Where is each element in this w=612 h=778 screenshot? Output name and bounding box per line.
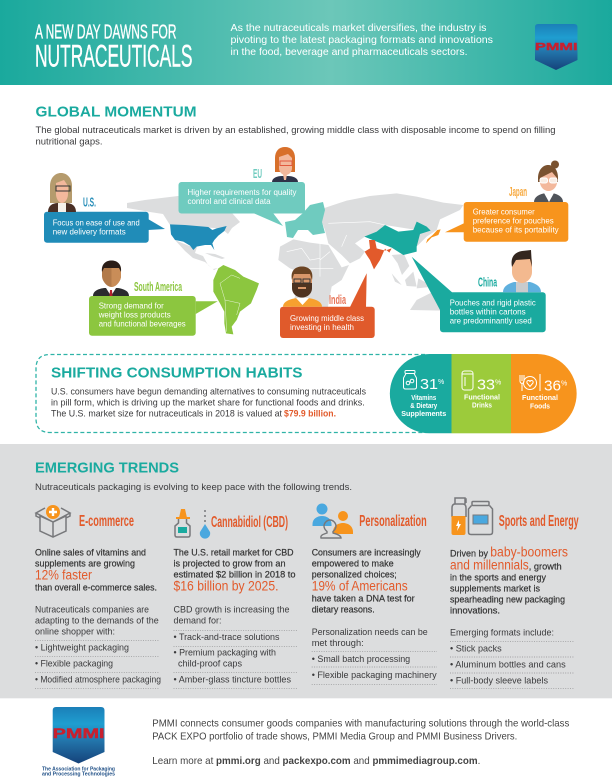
header intro text <box>230 22 493 58</box>
segment: vitamins 31%: & Dietary <box>410 401 438 410</box>
e-commerce details: adapting to the demands of the <box>35 616 159 627</box>
segment: foods 36%: Foods <box>530 401 550 410</box>
title <box>35 21 192 74</box>
callout: Japan: Greater consumer <box>473 207 535 217</box>
e-commerce list: • Lightweight packaging <box>35 643 129 654</box>
footer PMMI logo <box>53 707 104 764</box>
label: China: China <box>478 276 498 290</box>
global momentum intro text: nutritional gaps. <box>36 137 102 148</box>
footer text: PMMI connects consumer goods companies with manufacturing solutions through the world-class <box>152 717 569 729</box>
emerging trends intro: Nutraceuticals packaging is evolving to keep pace with the following trends. <box>35 482 352 493</box>
callout: South America: and functional beverages <box>99 319 186 329</box>
segment: vitamins 31% <box>390 354 452 433</box>
sports and energy list: • Full-body sleeve labels <box>450 676 548 687</box>
callout: China: bottles within cartons <box>450 307 526 317</box>
footer logo tagline: The Association for Packaging <box>42 767 115 773</box>
shifting consumption body text <box>51 386 366 419</box>
personalization lead text: dietary reasons. <box>312 605 375 616</box>
callout: China: are predominantly used <box>450 316 532 326</box>
icon: open box with plus <box>36 505 70 537</box>
column: personalization <box>312 504 437 684</box>
segment: drinks 33%: Drinks <box>472 400 492 409</box>
person: South America man <box>93 260 129 296</box>
callout: India: investing in health <box>290 322 354 332</box>
shifting consumption body text: U.S. consumers have begun demanding alternatives to consuming nutraceuticals <box>51 386 366 397</box>
cannabidiol lead text: is projected to grow from an <box>174 559 286 570</box>
segment: vitamins 31%: % <box>438 379 444 386</box>
callout: U.S. <box>44 212 165 243</box>
PMMI logo: PMMI <box>535 41 578 53</box>
segment: foods 36% <box>511 354 577 433</box>
heading: global momentum: GLOBAL MOMENTUM <box>36 104 196 121</box>
personalization lead text <box>312 548 421 616</box>
segment: drinks 33%: Functional <box>464 392 500 401</box>
cannabidiol details <box>174 605 290 627</box>
eurasia, africa and oceania land <box>278 193 463 311</box>
sports and energy list <box>450 641 574 688</box>
india highlighted <box>365 240 392 269</box>
callout: India <box>280 273 375 338</box>
personalization details: Personalization needs can be <box>312 627 428 638</box>
personalization lead text: personalized choices; <box>312 570 397 581</box>
shifting consumption body text: The U.S. market size for nutraceuticals in 2018 is valued at <box>51 408 282 419</box>
column: e-commerce <box>35 505 161 688</box>
column: sports and energy <box>450 498 579 688</box>
heading: e-commerce: E-commerce <box>79 513 134 530</box>
title: A NEW DAY DAWNS FOR <box>35 21 176 44</box>
icon: people <box>312 504 353 538</box>
icon: drink can <box>462 371 473 390</box>
dashed panel border <box>36 354 425 432</box>
e-commerce details: online shopper with: <box>35 627 115 638</box>
segment: drinks 33% <box>452 354 511 433</box>
person: Japan woman <box>534 160 563 202</box>
callout: South America <box>89 296 218 336</box>
callout: U.S.: Focus on ease of use and <box>53 218 140 228</box>
label: South America: South America <box>134 280 183 294</box>
heading: shifting consumption habits: SHIFTING CONSUMPTION HABITS <box>51 365 302 382</box>
cannabidiol lead text <box>174 548 296 594</box>
e-commerce list: • Flexible packaging <box>35 659 113 670</box>
heading: emerging trends: EMERGING TRENDS <box>35 460 179 477</box>
header intro text: in the food, beverage and pharmaceuticals sectors. <box>230 46 468 58</box>
header intro text: pivoting to the latest packaging formats and innovations <box>230 34 493 46</box>
pill chart: market shares <box>390 354 577 433</box>
united states highlighted <box>170 224 227 250</box>
e-commerce list: • Modified atmosphere packaging <box>35 675 161 686</box>
callout: South America: weight loss products <box>98 310 171 320</box>
e-commerce details: Nutraceuticals companies are <box>35 605 149 616</box>
sports and energy lead text: spearheading new packaging <box>450 595 565 606</box>
person: EU woman <box>272 147 298 182</box>
callout: Japan <box>445 202 568 242</box>
title: NUTRACEUTICALS <box>35 38 192 74</box>
footer logo tagline: and Processing Technologies <box>42 772 115 778</box>
e-commerce lead text: 12% faster <box>35 567 92 582</box>
callout: U.S.: new delivery formats <box>53 227 126 237</box>
label: India: India <box>329 293 347 307</box>
footer logo tagline <box>42 767 115 778</box>
global momentum intro text <box>36 125 556 148</box>
footer text: PACK EXPO portfolio of trade shows, PMMI Media Group and PMMI Business Drivers. <box>152 730 517 742</box>
sports and energy details: Emerging formats include: <box>450 628 554 639</box>
e-commerce lead text: supplements are growing <box>35 559 135 570</box>
sports and energy lead text: baby-boomers <box>490 545 568 560</box>
icon: plate with heart <box>520 374 540 391</box>
e-commerce lead text <box>35 548 157 594</box>
personalization details: met through: <box>312 638 364 649</box>
segment: drinks 33%: % <box>495 380 501 386</box>
heading: personalization: Personalization <box>359 513 427 530</box>
footer <box>42 707 569 778</box>
cannabidiol list: • Amber-glass tincture bottles <box>174 675 291 686</box>
cannabidiol lead text: estimated $2 billion in 2018 to <box>174 570 296 581</box>
e-commerce details <box>35 605 159 638</box>
cannabidiol list: • Track-and-trace solutions <box>174 632 280 643</box>
north america land <box>127 196 240 270</box>
footer text: Learn more at pmmi.org and packexpo.com and pmmimediagroup.com. <box>152 755 480 767</box>
section: global momentum: Japan <box>509 185 527 199</box>
cannabidiol list: child-proof caps <box>178 659 242 670</box>
sports and energy lead text: and millennials <box>450 557 529 572</box>
japan highlighted <box>426 229 441 243</box>
sports and energy lead text: in the sports and energy <box>450 573 546 584</box>
sports and energy list: • Stick packs <box>450 644 502 655</box>
PMMI logo <box>535 24 578 70</box>
segment: vitamins 31%: 31 <box>420 376 438 393</box>
column: cannabidiol <box>174 509 298 688</box>
cannabidiol lead text: The U.S. retail market for CBD <box>174 548 294 559</box>
section: emerging trends <box>0 444 612 698</box>
shifting consumption body text: $79.9 billion. <box>284 408 336 419</box>
heading: cannabidiol: Cannabidiol (CBD) <box>211 514 288 531</box>
china highlighted <box>364 222 431 255</box>
personalization lead text: Consumers are increasingly <box>312 548 421 559</box>
icon: shaker and protein jar <box>452 498 492 535</box>
world map <box>127 193 463 334</box>
europe highlighted <box>285 202 325 238</box>
personalization list: • Flexible packaging machinery <box>312 670 437 681</box>
callout: India: Growing middle class <box>290 313 364 323</box>
person: India man <box>283 266 322 307</box>
shifting consumption body text: in pill form, which is driving up the market share for functional foods and drinks. <box>51 397 365 408</box>
personalization lead text: empowered to make <box>312 559 394 570</box>
segment: foods 36%: % <box>561 380 567 388</box>
global momentum intro text: The global nutraceuticals market is driven by an established, growing middle class with disposable income to spend on filling <box>36 125 556 136</box>
cannabidiol details: CBD growth is increasing the <box>174 605 290 616</box>
sports and energy lead text: supplements market is <box>450 584 540 595</box>
header intro text: As the nutraceuticals market diversifies, the industry is <box>230 22 486 34</box>
section: shifting consumption habits <box>36 354 577 433</box>
e-commerce lead text: Online sales of vitamins and <box>35 548 146 559</box>
south america highlighted <box>213 265 259 334</box>
sports and energy list: • Aluminum bottles and cans <box>450 660 566 671</box>
callout: China: Pouches and rigid plastic <box>450 298 536 308</box>
section: global momentum: EU <box>253 166 262 181</box>
segment: vitamins 31%: Supplements <box>401 409 446 418</box>
e-commerce lead text: than overall e-commerce sales. <box>35 583 157 594</box>
cannabidiol lead text: $16 billion by 2025. <box>174 579 278 594</box>
sports and energy lead text: innovations. <box>450 606 500 617</box>
segment: vitamins 31%: Vitamins <box>411 393 436 402</box>
callout: Japan: preference for pouches <box>473 216 554 226</box>
callout: China <box>412 257 546 332</box>
personalization lead text: have taken a DNA test for <box>312 594 415 605</box>
icon: dropper bottle <box>175 509 210 539</box>
callout: EU: control and clinical data <box>188 196 271 206</box>
label: U.S.: U.S. <box>83 195 96 210</box>
section: global momentum <box>36 104 568 338</box>
e-commerce list <box>35 641 161 688</box>
sports and energy lead text: , growth <box>529 561 562 572</box>
header banner <box>0 0 612 85</box>
cannabidiol list <box>174 630 298 688</box>
footer text <box>152 717 569 767</box>
cannabidiol details: demand for: <box>174 616 222 627</box>
sports and energy lead text <box>450 545 568 617</box>
callout: South America: Strong demand for <box>99 301 164 311</box>
footer PMMI logo: PMMI <box>53 726 104 741</box>
personalization list <box>312 652 437 684</box>
personalization list: • Small batch processing <box>312 654 410 665</box>
personalization details <box>312 627 428 649</box>
callout: Japan: because of its portability <box>473 225 559 235</box>
cannabidiol list: • Premium packaging with <box>174 648 276 659</box>
person: China man <box>503 250 541 292</box>
segment: foods 36%: 36 <box>544 378 561 395</box>
person: U.S. woman <box>48 173 76 212</box>
segment: drinks 33%: 33 <box>477 376 495 393</box>
callout: EU: Higher requirements for quality <box>188 187 297 197</box>
personalization lead text: 19% of Americans <box>312 579 408 594</box>
segment: foods 36%: Functional <box>522 393 558 402</box>
icon: supplement jar <box>404 370 416 389</box>
callout: EU <box>178 182 305 226</box>
sports and energy lead text: Driven by <box>450 549 488 560</box>
